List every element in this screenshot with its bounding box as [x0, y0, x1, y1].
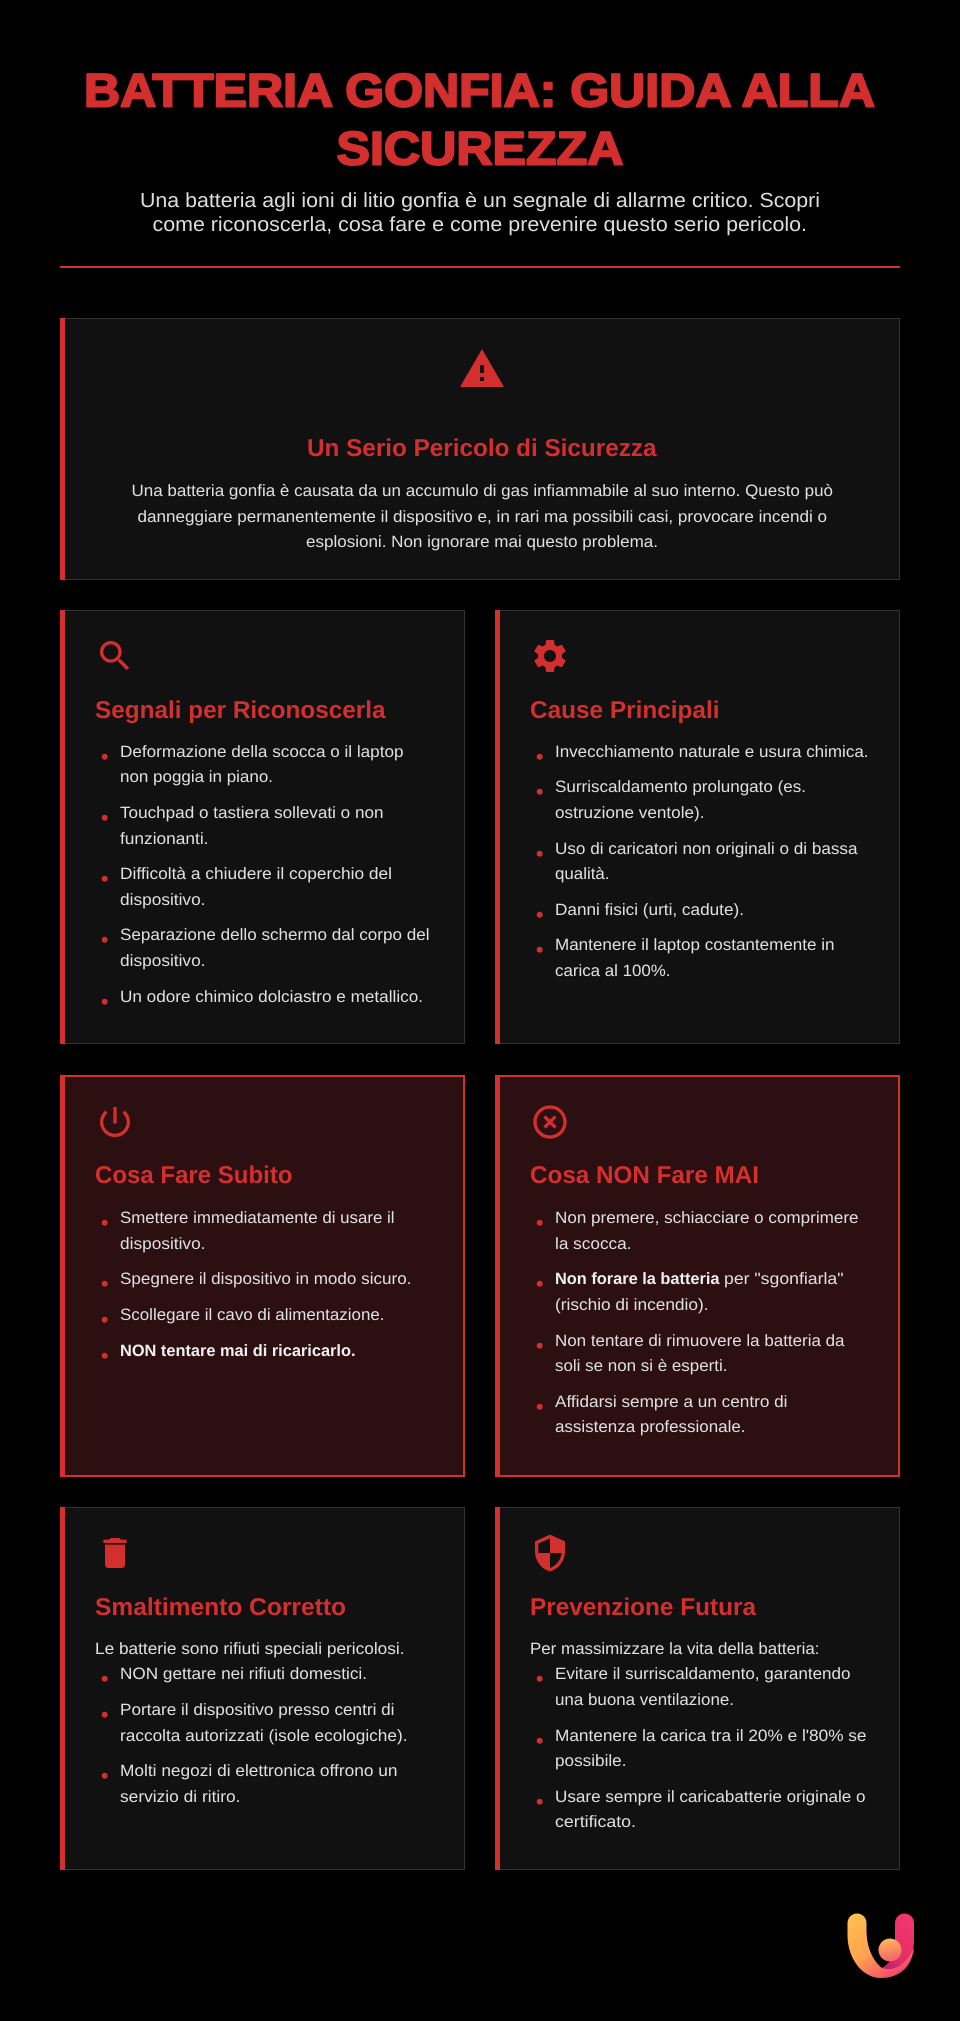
list: prevention: possibile.: [555, 1752, 626, 1770]
list: what to do: Smettere immediatamente di usare il: [120, 1209, 394, 1227]
heading: causes: Cause Principali: [530, 697, 720, 724]
list: signs: Deformazione della scocca o il laptop: [120, 743, 404, 761]
heading: what to do: Cosa Fare Subito: [95, 1162, 292, 1189]
icon: trash bin: [103, 1538, 127, 1568]
heading: prevention: Prevenzione Futura: [530, 1594, 756, 1621]
heading: disposal: Smaltimento Corretto: [95, 1594, 346, 1621]
panel: what to do: [60, 1075, 464, 1477]
icon: power: [100, 1107, 130, 1137]
title: BATTERIA GONFIA: GUIDA ALLA: [84, 64, 875, 116]
list: disposal: servizio di ritiro.: [120, 1788, 240, 1806]
list: prevention: Mantenere la carica tra il 20% e l'80% se: [555, 1727, 866, 1745]
list: causes: Uso di caricatori non originali o di bassa: [555, 840, 858, 858]
subtitle: [140, 190, 820, 236]
title: [84, 64, 875, 174]
list: what not to do: soli se non si è esperti.: [555, 1357, 728, 1375]
text block: prevention intro: Per massimizzare la vita della batteria:: [530, 1640, 820, 1658]
list: what not to do: assistenza professionale.: [555, 1418, 746, 1436]
icon: gear: [534, 640, 566, 672]
list: what not to do: Non forare la batteria: [555, 1270, 720, 1288]
list: causes: qualità.: [555, 865, 610, 883]
panel: serious danger: [60, 318, 900, 580]
list: disposal: Molti negozi di elettronica offrono un: [120, 1762, 398, 1780]
list: what not to do: Affidarsi sempre a un centro di: [555, 1393, 788, 1411]
list: what not to do: Non premere, schiacciare o comprimere: [555, 1209, 858, 1227]
list: what to do: Spegnere il dispositivo in modo sicuro.: [120, 1270, 412, 1288]
list: prevention: Usare sempre il caricabatterie originale o: [555, 1788, 866, 1806]
panel: prevention: [495, 1507, 900, 1870]
icon: warning triangle: [460, 349, 504, 387]
list: what to do: dispositivo.: [120, 1235, 206, 1253]
list: disposal: raccolta autorizzati (isole ecologiche).: [120, 1727, 408, 1745]
list: signs: [102, 743, 429, 1006]
list: disposal: [102, 1665, 407, 1806]
list: signs: Difficoltà a chiudere il coperchio del: [120, 865, 392, 883]
list: what to do: NON tentare mai di ricaricarlo.: [120, 1342, 356, 1360]
list: causes: Mantenere il laptop costantemente in: [555, 936, 834, 954]
subtitle: Una batteria agli ioni di litio gonfia è un segnale di allarme critico. Scopri: [140, 190, 820, 212]
list: signs: non poggia in piano.: [120, 768, 273, 786]
list: signs: dispositivo.: [120, 891, 206, 909]
list: what not to do: (rischio di incendio).: [555, 1296, 708, 1314]
list: what to do: [102, 1209, 411, 1360]
icon: brand logo: [848, 1914, 914, 1978]
list: signs: dispositivo.: [120, 952, 206, 970]
list: causes: Surriscaldamento prolungato (es.: [555, 778, 806, 796]
icon: cancel circle: [533, 1105, 567, 1139]
list: what to do: Scollegare il cavo di alimentazione.: [120, 1306, 384, 1324]
icon: magnifier: [100, 641, 129, 670]
text block: disposal intro: Le batterie sono rifiuti speciali pericolosi.: [95, 1640, 404, 1658]
text block: danger description: [132, 482, 833, 551]
list: signs: Un odore chimico dolciastro e metallico.: [120, 988, 423, 1006]
heading: signs: Segnali per Riconoscerla: [95, 697, 386, 724]
list: what not to do: la scocca.: [555, 1235, 632, 1253]
list: signs: Touchpad o tastiera sollevati o non: [120, 804, 384, 822]
text block: danger description: esplosioni. Non ignorare mai questo problema.: [306, 533, 658, 551]
list: what not to do: [537, 1209, 858, 1436]
list: causes: [537, 743, 868, 980]
text block: danger description: Una batteria gonfia è causata da un accumulo di gas infiammabile al suo interno. Questo può: [132, 482, 833, 500]
list: causes: Invecchiamento naturale e usura chimica.: [555, 743, 868, 761]
list: prevention: [537, 1665, 866, 1831]
list: what not to do: per "sgonfiarla": [724, 1270, 844, 1288]
list: signs: Separazione dello schermo dal corpo del: [120, 926, 430, 944]
panel: what not to do: [495, 1075, 899, 1477]
icon: shield: [535, 1535, 565, 1571]
heading: what not to do: Cosa NON Fare MAI: [530, 1162, 759, 1189]
panel: causes: [495, 610, 900, 1044]
panel: signs: [60, 610, 464, 1044]
title: SICUREZZA: [336, 122, 624, 174]
list: disposal: NON gettare nei rifiuti domestici.: [120, 1665, 367, 1683]
header: [60, 64, 900, 268]
list: causes: carica al 100%.: [555, 962, 670, 980]
list: what not to do: Non tentare di rimuovere la batteria da: [555, 1332, 845, 1350]
list: prevention: certificato.: [555, 1813, 636, 1831]
text block: danger description: danneggiare permanentemente il dispositivo e, in rari ma possibili casi, provocare incendi o: [138, 508, 827, 526]
panel: disposal: [60, 1507, 464, 1870]
list: disposal: Portare il dispositivo presso centri di: [120, 1701, 394, 1719]
list: prevention: Evitare il surriscaldamento, garantendo: [555, 1665, 850, 1683]
header rule: [60, 266, 900, 268]
list: causes: ostruzione ventole).: [555, 804, 704, 822]
list: causes: Danni fisici (urti, cadute).: [555, 901, 744, 919]
heading: serious danger: Un Serio Pericolo di Sicurezza: [307, 435, 657, 462]
list: prevention: una buona ventilazione.: [555, 1691, 734, 1709]
subtitle: come riconoscerla, cosa fare e come prevenire questo serio pericolo.: [152, 214, 807, 236]
list: signs: funzionanti.: [120, 830, 208, 848]
